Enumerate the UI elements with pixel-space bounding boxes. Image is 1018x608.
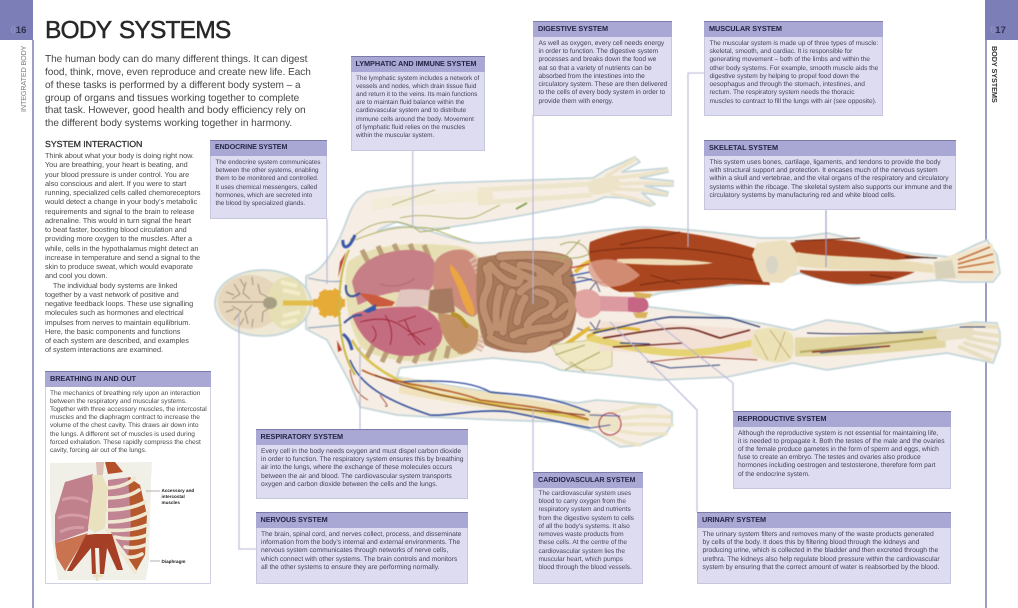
panel: lymphatic and immune system bbox=[350, 56, 485, 150]
lower foot bones bbox=[942, 325, 999, 360]
central diaphragm bbox=[67, 534, 123, 574]
vertebrae bbox=[93, 572, 103, 581]
heading bbox=[256, 428, 468, 444]
text: The urinary system filters and removes many of the waste products generated by cells of the body. It does this by filtering blood through the kidneys and producing urine, which is collected in the bladder and then excreted through the urethra. The kidneys also help regulate blood pressure within the cardiovascular system by ensuring that the correct amount of water is reabsorbed by the blood. bbox=[702, 531, 940, 571]
panel: respiratory system bbox=[256, 428, 468, 499]
heading bbox=[533, 20, 672, 36]
right lung under ribs bbox=[108, 477, 132, 562]
connector lines bbox=[239, 73, 826, 549]
lower leg vessels and bones bbox=[587, 317, 950, 368]
right running head: BODY SYSTEMS bbox=[990, 46, 999, 103]
chest illustration bbox=[50, 462, 194, 581]
ribcage bbox=[345, 244, 491, 363]
leader lines bbox=[146, 491, 160, 561]
heading bbox=[732, 411, 951, 427]
left diaphragm muscle bbox=[55, 533, 88, 571]
heading bbox=[704, 20, 883, 36]
left running head: INTEGRATED BODY bbox=[19, 46, 28, 112]
intro paragraph: The human body can do many different things. It can digest food, think, move, even reproduce and create new life. Each of these tasks is performed by a different body system – a group of organs and tissues working together to complete that task. However, good health and body efficiency rely on the different body systems working together in harmony. bbox=[45, 54, 311, 129]
heading bbox=[256, 512, 468, 528]
heading: ENDOCRINE SYSTEM bbox=[215, 144, 287, 151]
text: The brain, spinal cord, and nerves collect, process, and disseminate information from the body’s internal and external environments. The nervous system communicates through networks of nerve cells, which connect with other systems. The brain controls and monitors all the other systems to ensure they are performing normally. bbox=[261, 531, 461, 571]
pelvis and reproductive organs bbox=[565, 255, 652, 345]
heading bbox=[704, 140, 956, 156]
heading: MUSCULAR SYSTEM bbox=[709, 24, 782, 32]
heading: SKELETAL SYSTEM bbox=[709, 142, 778, 152]
panel: breathing in and out bbox=[45, 371, 211, 584]
top hand bones bbox=[596, 159, 672, 204]
heading: URINARY SYSTEM bbox=[702, 515, 766, 524]
left lung bbox=[55, 474, 93, 543]
panel: cardiovascular system bbox=[533, 472, 643, 584]
heading bbox=[210, 140, 327, 156]
left page tab bbox=[0, 0, 33, 40]
hip bones and nerves bbox=[548, 240, 612, 372]
sternum bbox=[88, 475, 108, 533]
left page rule bbox=[32, 40, 34, 608]
lower arm vessels bbox=[350, 340, 590, 428]
title: BODY SYSTEMS bbox=[45, 17, 230, 44]
body silhouette bbox=[215, 157, 1000, 447]
heading bbox=[350, 56, 485, 72]
body text: system interaction: Think about what your body is doing right now. You are breathing, your heart is beating, and your blood pressure is under control. You are also conscious and alert. If you were to start running, specialized cells called chemoreceptors would detect a change in your body’s metabolic requirements and signal to the brain to release adrenaline. This would in turn signal the heart to beat faster, boosting blood circulation and providing more oxygen to the muscles. After a while, cells in the hypothalamus might detect an increase in temperature and send a signal to the skin to produce sweat, which would evaporate and cool you down. The individual body systems are linked together by a vast network of positive and negative feedback loops. These use signalling molecules such as hormones and electrical impulses from nerves to maintain equilibrium. Here, the basic components and functions of each system are described, and examples of system interactions are examined. bbox=[45, 151, 200, 354]
right page tab bbox=[985, 0, 1018, 40]
heading: system interaction: SYSTEM INTERACTION bbox=[45, 139, 142, 149]
text: This system uses bones, cartilage, ligaments, and tendons to provide the body with structural support and protection. It encases much of the nervous system within a skull and vertebrae, and the vital organs of the respiratory and circulatory systems within the ribcage. The skeletal system also supports our immune and the circulatory systems by manufacturing red and white blood cells. bbox=[710, 159, 952, 199]
right page rule bbox=[985, 40, 986, 608]
text: The endocrine system communicates between the other systems, enabling them to be monitored and controlled. It uses chemical messengers, called hormones, which are secreted into the blood by specialized glands. bbox=[216, 159, 320, 207]
text: As well as oxygen, every cell needs energy in order to function. The digestive system processes and breaks down the food we eat so that a variety of nutrients can be absorbed from the intestines into the circulatory system. These are then delivered to the cells of every body system in order to provide them with energy. bbox=[538, 40, 667, 105]
lungs bbox=[352, 250, 442, 356]
label: diaphragm: Diaphragm bbox=[162, 559, 186, 564]
panel: endocrine system bbox=[210, 140, 327, 219]
upper foot bbox=[933, 243, 997, 281]
knee bbox=[752, 240, 797, 283]
label: accessory and intercostal muscles: intercostal bbox=[162, 494, 185, 499]
heading: DIGESTIVE SYSTEM bbox=[538, 24, 608, 32]
liver and stomach bbox=[428, 250, 482, 354]
panel: reproductive system bbox=[732, 411, 951, 488]
head and brain bbox=[218, 275, 345, 329]
lung mottling bbox=[58, 498, 88, 532]
heading: BREATHING IN AND OUT bbox=[50, 374, 136, 383]
right chest muscle bbox=[128, 477, 147, 573]
left page number: 016 bbox=[10, 25, 26, 36]
lower leg muscles and shin bone bbox=[790, 238, 937, 284]
text: The lymphatic system includes a network of vessels and nodes, which drain tissue fluid and return it to the veins. Its main functions are to maintain fluid balance within the cardiovascular system and to distribute immune cells around the body. Movement of lymphatic fluid relies on the muscles within the muscular system. bbox=[356, 74, 479, 139]
heading bbox=[45, 371, 211, 387]
heading: REPRODUCTIVE SYSTEM bbox=[738, 414, 826, 423]
neck bbox=[96, 462, 104, 475]
heading: CARDIOVASCULAR SYSTEM bbox=[538, 476, 635, 484]
text: The mechanics of breathing rely upon an interaction between the respiratory and muscular systems. Together with three accessory muscles, the intercostal muscles and the diaphragm contract to increase the volume of the chest cavity. This draws air down into the lungs. A different set of muscles is used during forced exhalation. These rapidly compress the chest cavity, forcing air out of the lungs. bbox=[50, 390, 207, 454]
thigh muscles bbox=[588, 229, 770, 292]
heading: NERVOUS SYSTEM bbox=[260, 514, 328, 524]
spine bbox=[472, 258, 487, 350]
intestines bbox=[476, 251, 577, 352]
panel: nervous system bbox=[256, 512, 468, 584]
heading bbox=[697, 512, 951, 528]
text: Although the reproductive system is not essential for maintaining life, it is needed to propagate it. Both the testes of the male and the ovaries of the female produce gametes in the form of sperm and eggs, which fuse to create an embryo. The testes and ovaries also produce hormones including oestrogen and testosterone, therefore form part of the endocrine system. bbox=[738, 430, 945, 478]
panel: urinary system bbox=[697, 512, 951, 584]
heading: RESPIRATORY SYSTEM bbox=[260, 432, 343, 440]
panel: muscular system bbox=[704, 20, 883, 116]
ribs bbox=[107, 478, 147, 572]
panel: digestive system bbox=[533, 20, 672, 116]
lower hand bbox=[590, 406, 672, 445]
top arm bones and nerves bbox=[350, 184, 592, 242]
text: The cardiovascular system uses blood to carry oxygen from the respiratory system and nutrients from the digestive system to cells of all the body’s systems. It also removes waste products from these cells. At the centre of the cardiovascular system lies the muscular heart, which pumps blood through the blood vessels. bbox=[538, 490, 634, 571]
heading bbox=[533, 472, 643, 488]
right page number: 017 bbox=[990, 25, 1006, 36]
text: Every cell in the body needs oxygen and must dispel carbon dioxide in order to function. The respiratory system ensures this by breathing air into the lungs, where the exchange of these molecules occurs between the air and blood. The cardiovascular system transports oxygen and carbon dioxide between the cells and the lungs. bbox=[261, 448, 463, 488]
panel: skeletal system bbox=[704, 140, 956, 210]
torso background bbox=[50, 462, 152, 580]
text: The muscular system is made up of three types of muscle: skeletal, smooth, and cardiac. It is responsible for generating movement – both of the limbs and within the other body systems. For example, smooth muscle aids the digestive system by helping to propel food down the oesophagus and through the stomach, intestines, and rectum. The respiratory system needs the thoracic muscles to contract to fill the lungs with air (see opposite). bbox=[710, 40, 878, 105]
heart and great vessels bbox=[337, 235, 395, 375]
label: accessory and intercostal muscles: Accessory and bbox=[162, 488, 194, 493]
label: accessory and intercostal muscles: muscles bbox=[162, 500, 180, 505]
heading: LYMPHATIC AND IMMUNE SYSTEM bbox=[356, 58, 476, 68]
top muscle bbox=[105, 462, 123, 474]
